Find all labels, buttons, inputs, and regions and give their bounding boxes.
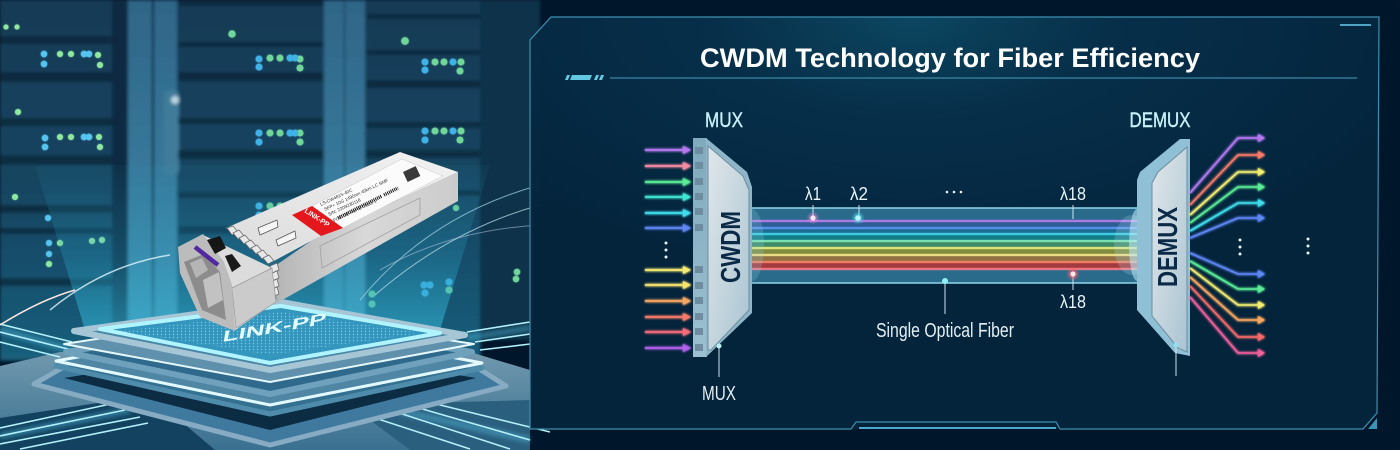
- front opening: [178, 234, 235, 331]
- DEMUX label: DEMUX: [1152, 207, 1183, 287]
- label: lambda 18 top: λ18: [1060, 184, 1086, 204]
- module body side: [272, 172, 458, 303]
- white product label: LS-CW4815-40C: [319, 187, 354, 207]
- label: DEMUX top: DEMUX: [1130, 109, 1190, 132]
- front cage: [203, 235, 276, 330]
- title divider: [565, 75, 1357, 80]
- label: lambda 1: λ1: [805, 184, 821, 204]
- metal teeth: [227, 226, 279, 297]
- optical fiber with wavelength lines: [740, 208, 1150, 283]
- ellipsis dots: [664, 191, 1310, 258]
- platform logo: LINK-PP: [221, 311, 328, 346]
- label: MUX bottom: MUX: [702, 383, 736, 405]
- status LEDs: [4, 24, 520, 307]
- purple wavelength bar: [195, 247, 218, 265]
- SFP transceiver module: [178, 152, 458, 331]
- label: lambda 2: λ2: [850, 184, 868, 204]
- latch slots: [207, 236, 226, 254]
- latch tabs: [258, 220, 296, 246]
- DEMUX device: [1137, 139, 1190, 356]
- title: CWDM Technology for Fiber Efficiency: [700, 43, 1200, 73]
- white product label: S/N: 2209230118: [327, 197, 362, 217]
- red brand label: LINK-PP: [303, 208, 330, 229]
- CWDM label: CWDM: [715, 211, 746, 283]
- red brand label: [292, 206, 343, 236]
- module top face: [226, 152, 458, 262]
- white product label: SFP+ 10G 1490nm 40km LC SMF: [323, 178, 389, 212]
- label: MUX top: MUX: [705, 109, 743, 132]
- light beam above platform: [35, 165, 490, 330]
- platform chip: [34, 302, 506, 445]
- white product label: FCC CE RoHS Class 1: [332, 198, 378, 223]
- wavelength markers and leaders: [716, 205, 1178, 377]
- input arrows: [645, 146, 691, 352]
- main diagram panel: [530, 17, 1379, 429]
- label: lambda 18 bottom: λ18: [1060, 292, 1086, 312]
- white product label: [312, 159, 443, 228]
- MUX device: [693, 138, 752, 357]
- output arrows: [1190, 134, 1265, 357]
- ground floor with light streaks: [0, 185, 550, 450]
- label: single optical fiber: Single Optical Fiber: [876, 320, 1014, 342]
